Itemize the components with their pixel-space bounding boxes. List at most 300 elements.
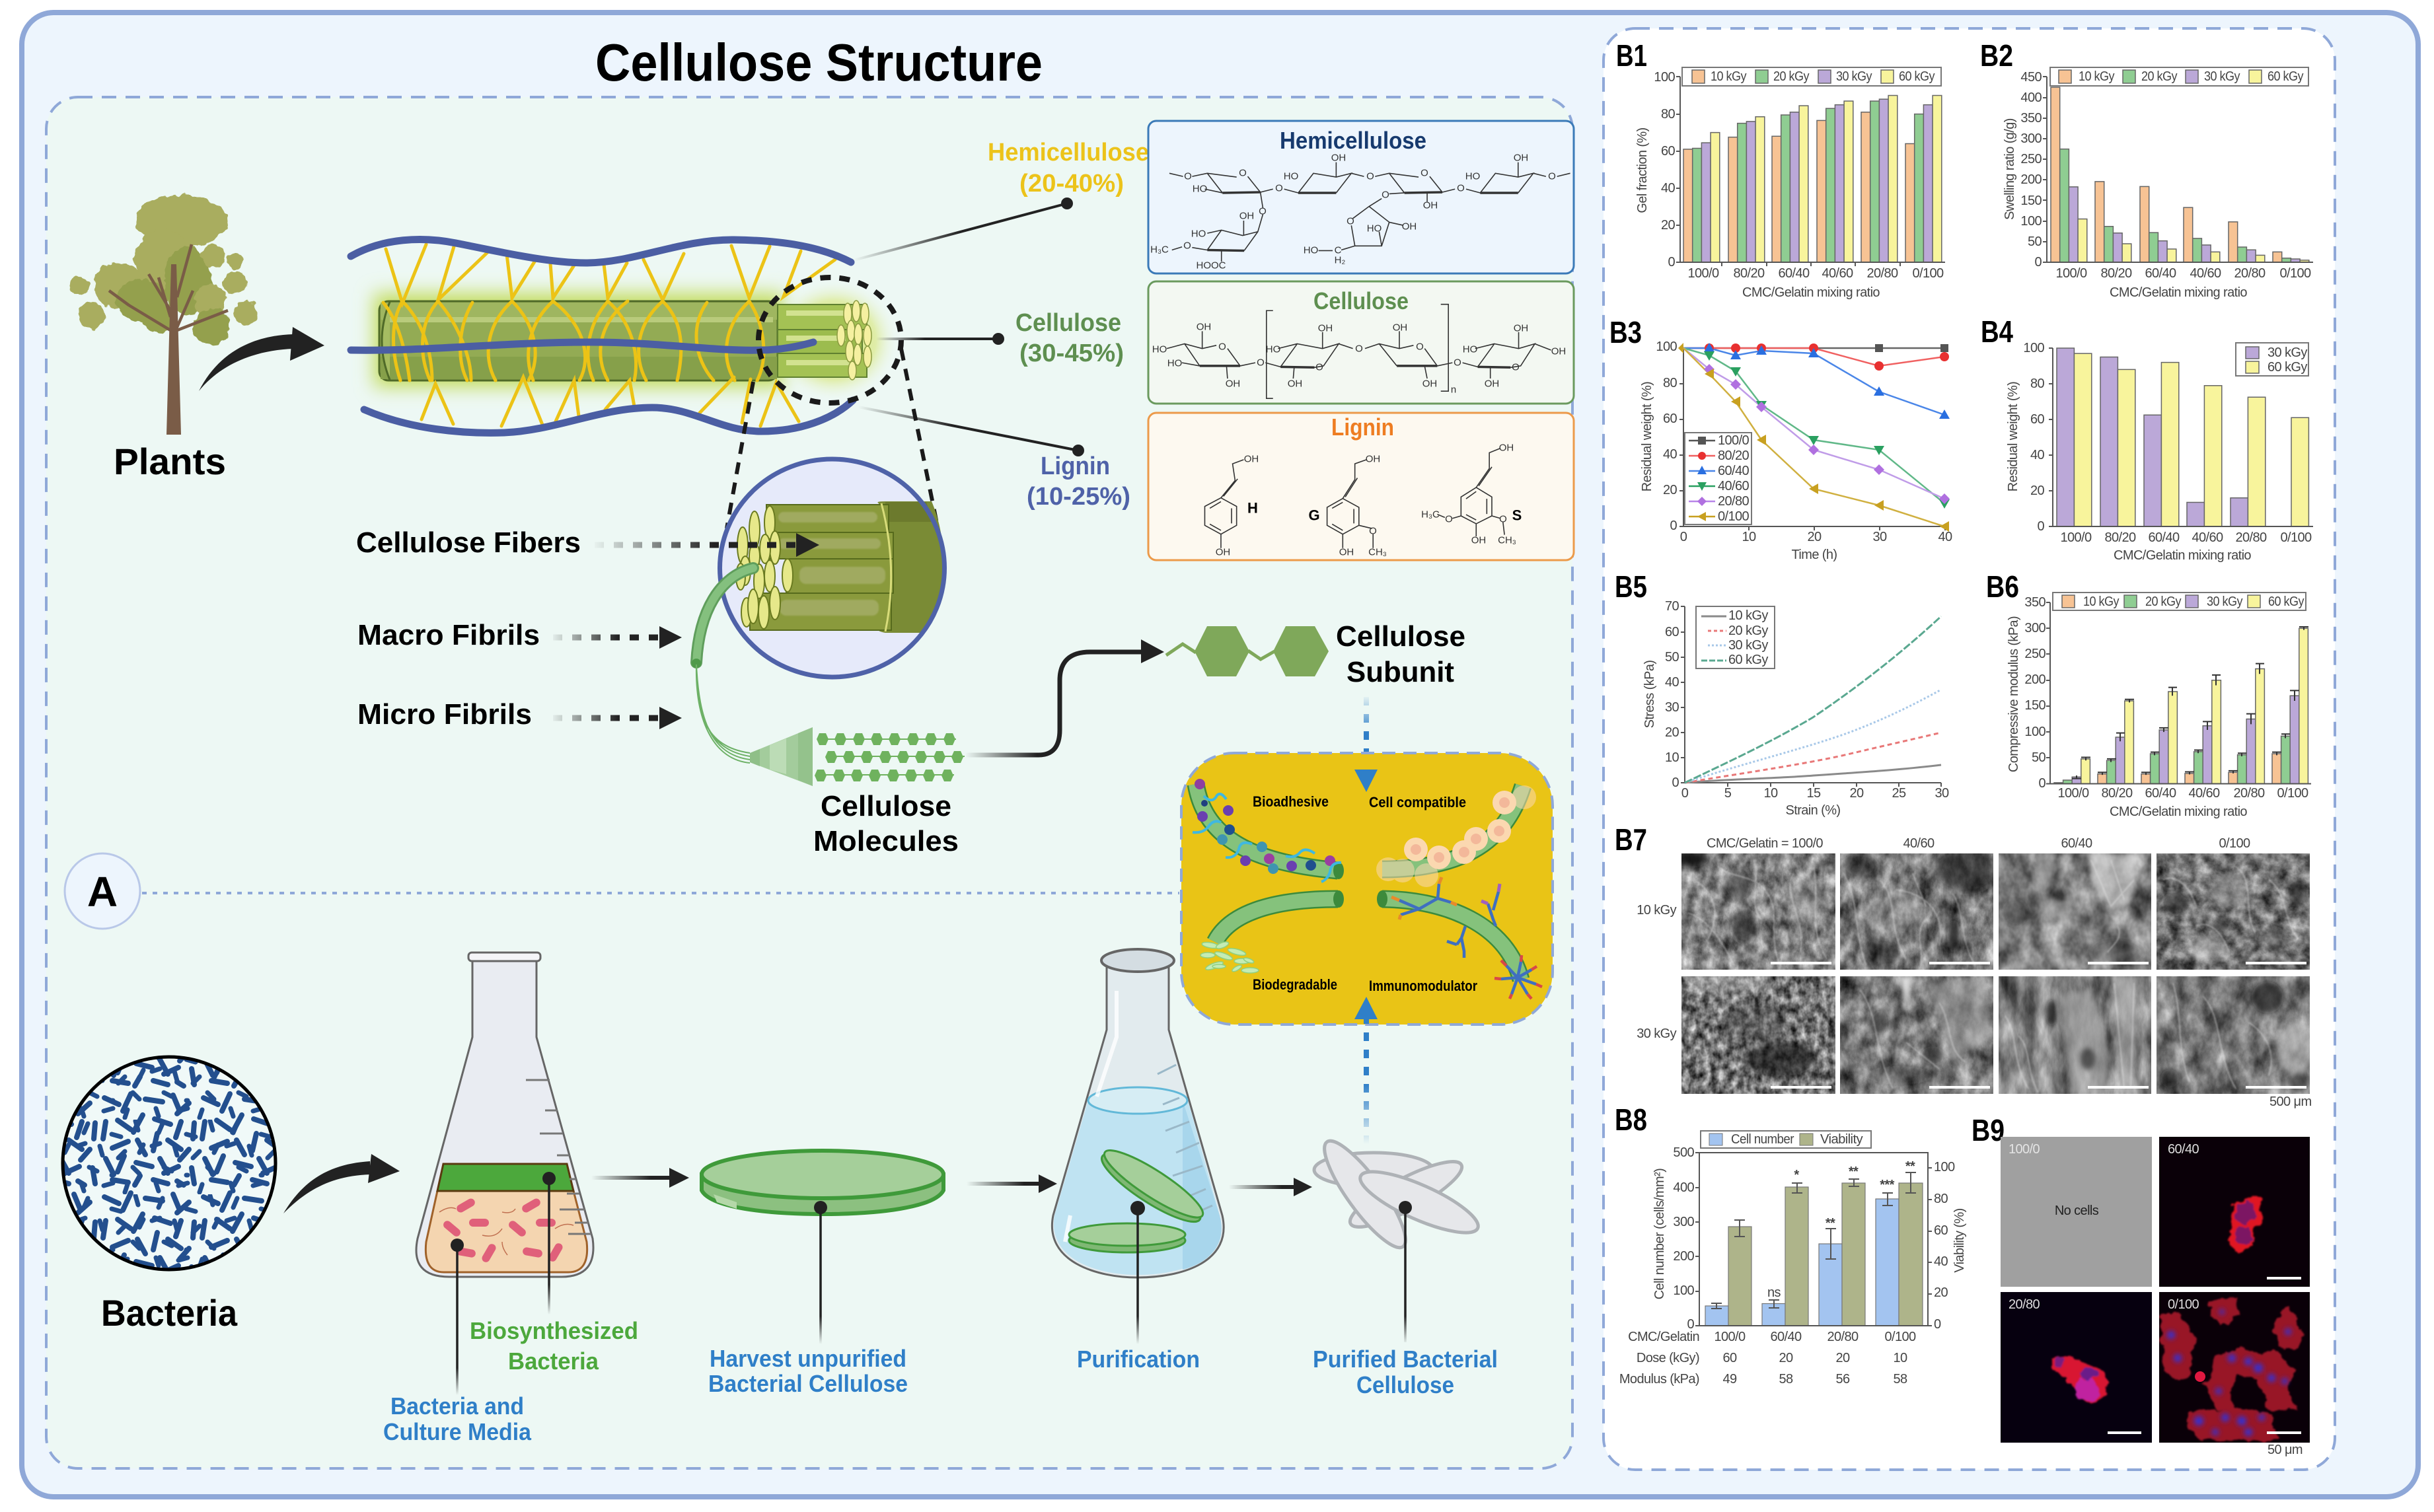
hemicellulose atom labels: HO [1304,244,1318,256]
cellulose atom labels: O [1218,341,1226,353]
chart B8: cell number and viability: 200 [1673,1249,1694,1264]
arrow: molecules to subunit [965,639,1164,755]
chart B5: stress strain: 30 [1665,700,1679,715]
chart B8: cell number and viability: 100 [1934,1160,1955,1174]
label: hemicellulose share [988,139,1149,198]
label: Cellulose Subunit: Cellulose [1336,620,1465,653]
chart B2: swelling ratio: 250 [2020,152,2042,166]
label: Cellulose Molecules: Molecules [813,825,959,857]
chart B6: compressive modulus: 350 [2024,595,2046,610]
chart B2: swelling ratio: 20/80 [2234,266,2266,281]
molecule funnel [750,727,813,786]
figure B9: fluorescence micrographs [1972,1113,2310,1457]
chart B8: cell number and viability: 100 [1673,1283,1694,1298]
lignin atom labels: CH₃ [1368,547,1387,558]
chart B6: compressive modulus: 100 [2024,725,2046,739]
chart B5: stress strain: 50 [1665,650,1679,665]
chart B1: gel fraction: B1 [1616,38,1647,73]
chart B8: cell number and viability: 80 [1934,1192,1948,1206]
label: Immunomodulator: Immunomodulator [1369,978,1477,994]
label: Bacteria and Culture Media: Bacteria and [390,1392,524,1420]
cellulose atom labels: HO [1167,358,1182,369]
chart B6: compressive modulus: 300 [2024,621,2046,635]
label: cellulose share: Cellulose [1015,309,1121,337]
table B8: 49 [1722,1372,1737,1386]
figure B7: SEM micrographs: 40/60 [1903,836,1935,851]
chart B5: stress strain: 20 [1665,725,1679,740]
chart B5: stress strain [1615,569,1949,818]
chart B3: residual weight over time: 40 [1663,447,1677,462]
chart B1: gel fraction: 100 [1654,70,1675,85]
chart B5: stress strain: 5 [1724,786,1732,801]
chart B3: residual weight over time: 0 [1680,530,1687,544]
chart B8: cell number and viability: ns [1767,1285,1781,1300]
chart B6: compressive modulus: 0/100 [2277,786,2308,801]
cellulose atom labels: OH [1485,378,1499,390]
chart B5: stress strain: 10 [1665,750,1679,765]
chart B5: stress strain: 70 [1665,599,1679,614]
chart B1: gel fraction: 30 kGy [1836,69,1872,84]
figure B7: SEM micrographs: 10 kGy [1637,903,1677,918]
chart B3: residual weight over time: 0 [1670,519,1677,533]
image 20/80: 20/80 [2009,1297,2040,1312]
arrow: micro fibrils [553,707,682,729]
chart B8: cell number and viability: 20 [1934,1285,1948,1300]
label: Macro Fibrils: Macro Fibrils [357,619,540,651]
chart B3: residual weight over time: 20 [1807,530,1822,544]
arrow: macro fibrils [553,626,682,649]
arrow: plants to fiber [199,327,324,391]
chart B4: residual weight by ratio: 100/0 [2060,530,2092,545]
chart B6: compressive modulus: 100/0 [2057,786,2089,801]
chart B1: gel fraction: CMC/Gelatin mixing ratio [1742,285,1880,300]
label: Harvest unpurified Bacterial Cellulose: Bacterial Cellulose [708,1370,908,1397]
hemicellulose atom labels: H₂ [1335,255,1346,266]
label: Harvest unpurified Bacterial Cellulose: Harvest unpurified [710,1345,906,1372]
label: Micro Fibrils: Micro Fibrils [357,698,532,731]
image 100/0: No cells [2055,1204,2099,1218]
cellulose atom labels: OH [1393,322,1407,333]
hemicellulose atom labels: O [1275,182,1283,194]
lignin atom labels: O [1499,514,1507,524]
arrow: disc to purification [967,1174,1057,1193]
fiber cylinder [379,301,778,380]
chart B6: compressive modulus: 200 [2024,672,2046,687]
fibril and micro fibrils [692,568,813,786]
cellulose atom labels: O [1416,341,1424,353]
chart B8: cell number and viability: B8 [1615,1102,1647,1137]
image 60/40: 60/40 [2168,1142,2199,1157]
chart B6: compressive modulus: 20/80 [2233,786,2265,801]
magnifier circle: cellulose fibers [720,459,945,677]
dashed zoom circle [758,277,901,403]
chart B1: gel fraction: 100/0 [1687,266,1719,281]
table B8: 58 [1779,1372,1793,1386]
chart B6: compressive modulus: 150 [2024,698,2046,713]
chart B8: cell number and viability: ** [1849,1165,1859,1179]
chart B2: swelling ratio: 100/0 [2055,266,2087,281]
hemicellulose atom labels: O [1457,182,1465,194]
icon: purified cellulose pieces [1313,1132,1485,1257]
label: Cellulose Fibers: Cellulose Fibers [356,526,581,559]
chart B1: gel fraction: 20 [1661,218,1675,233]
chart B8: cell number and viability: ** [1826,1216,1835,1231]
chart B8: cell number and viability: *** [1880,1178,1895,1192]
figure B7: SEM micrographs: 500 μm [2269,1095,2312,1109]
lignin atom labels: S [1512,507,1522,523]
chart B8: cell number and viability: 300 [1673,1215,1694,1229]
hemicellulose atom labels: OH [1331,152,1346,164]
chart B4: residual weight by ratio: 40 [2030,448,2044,462]
arrow: cellulose fibers [595,533,819,557]
label: Bioadhesive: Bioadhesive [1253,793,1329,810]
chart B1: gel fraction: 20 kGy [1773,69,1810,84]
arrow: bacteria to flask [283,1154,400,1213]
cellulose atom labels: HO [1463,343,1477,355]
legend B3: 100/0 [1718,433,1750,448]
chart B4: residual weight by ratio: 100 [2023,341,2044,355]
chart B6: compressive modulus: 10 kGy [2083,594,2120,609]
title: Cellulose Structure [595,33,1043,92]
chart B2: swelling ratio: 0 [2034,255,2042,270]
table B8 [1619,1330,1916,1386]
chart B4: residual weight by ratio: 0 [2037,519,2044,534]
lignin atom labels: OH [1471,535,1486,546]
chart B5: stress strain: 15 [1806,786,1821,801]
chart B1: gel fraction: 60 [1661,144,1675,159]
badge: panel A: A [87,868,118,916]
label: Purified Bacterial Cellulose: Cellulose [1356,1371,1454,1398]
table B8: 0/100 [1884,1330,1916,1344]
hemicellulose atom labels: O [1420,168,1428,178]
chart B4: residual weight by ratio: B4 [1981,314,2013,349]
chart B8: cell number and viability: 40 [1934,1254,1948,1269]
figure B7: SEM micrographs: B7 [1615,822,1647,857]
legend B8 [1701,1131,1871,1148]
leader: harvest [814,1201,827,1344]
panel: cellulose structure [1148,281,1574,404]
cellulose atom labels: HO [1152,343,1167,355]
figure B7: SEM micrographs: CMC/Gelatin = 100/0 [1707,836,1823,851]
label: Cellulose Molecules: Cellulose [821,790,951,822]
chart B4: residual weight by ratio: Residual weight (%) [2006,382,2020,491]
chart B3: residual weight over time: 20 [1663,483,1677,497]
chart B6: compressive modulus [1986,569,2311,819]
chart B4: residual weight by ratio: 40/60 [2192,530,2223,545]
chart B6: compressive modulus: 60 kGy [2268,594,2305,609]
axes B8 [1695,1153,1932,1326]
chart B2: swelling ratio: 50 [2028,234,2042,249]
image 100/0: 100/0 [2009,1142,2040,1157]
chart B4: residual weight by ratio: 20/80 [2235,530,2267,545]
diagram: lignocellulose fiber [351,240,901,433]
cellulose atom labels: OH [1288,378,1302,390]
chart B1: gel fraction [1616,38,1945,300]
chart B1: gel fraction: 40/60 [1822,266,1853,281]
panel: cellulose structure: Cellulose [1313,287,1409,314]
fiber glow [374,293,784,387]
hemicellulose atom labels: O [1346,215,1354,227]
chart B6: compressive modulus: 60/40 [2145,786,2176,801]
chart B5: stress strain: 40 [1665,675,1679,690]
chart B3: residual weight over time: Time (h) [1792,548,1837,562]
chart B1: gel fraction: 20/80 [1866,266,1898,281]
chart B8: cell number and viability: Cell number (cells/mm²) [1652,1169,1667,1299]
chart B3: residual weight over time: 60 [1663,412,1677,426]
figure B7: SEM micrographs [1615,822,2314,1109]
label: Biosynthesized Bacteria [470,1317,638,1375]
flask graduations [526,1080,591,1234]
label: Bacteria and Culture Media: Culture Media [383,1418,532,1445]
chart B2: swelling ratio: 60/40 [2145,266,2176,281]
icon: cell compatible fibril [1376,785,1536,887]
hemicellulose atom labels: HO [1465,170,1480,182]
label: Plants: Plants [114,441,226,482]
bars [1705,1183,1923,1326]
hemicellulose atom labels: OH [1402,221,1417,233]
chart B8: cell number and viability: * [1794,1168,1799,1182]
chart B8: cell number and viability [1615,1102,1967,1386]
chart B6: compressive modulus: 80/20 [2101,786,2133,801]
fiber bundle sleeve [877,501,944,633]
chart B2: swelling ratio: 80/20 [2100,266,2132,281]
chart B5: stress strain: Strain (%) [1786,803,1840,818]
chart B3: residual weight over time: 100 [1656,340,1677,354]
chart B8: cell number and viability: 0 [1687,1317,1694,1332]
chart B5: stress strain: 30 [1935,786,1949,801]
panel: lignin structure [1148,413,1574,560]
lignin atom labels: H₃C [1421,509,1440,521]
label: lignin share [1027,452,1130,511]
chart B5: stress strain: Stress (kPa) [1642,661,1657,728]
table B8: 100/0 [1714,1330,1746,1344]
legend B3: 80/20 [1718,449,1750,463]
hemicellulose atom labels: HO [1193,184,1207,194]
cellulose atom labels: O [1454,357,1461,369]
icon: tree [70,195,258,435]
chart B6: compressive modulus: 40/60 [2188,786,2220,801]
table B8: CMC/Gelatin [1628,1330,1699,1344]
hemicellulose atom labels: O [1184,170,1192,182]
chart B1: gel fraction: Gel fraction (%) [1635,127,1650,213]
label: Biosynthesized Bacteria: Bacteria [508,1348,599,1375]
chart B2: swelling ratio: 60 kGy [2268,69,2304,84]
image 60/40 [2159,1137,2310,1287]
lignin atom labels: OH [1339,547,1354,558]
chart B2: swelling ratio: 10 kGy [2079,69,2115,84]
cellulose atom labels: O [1512,362,1520,373]
cellulose atom labels [1152,321,1566,395]
cellulose atom labels: O [1315,362,1323,373]
cellulose atom labels: HO [1266,343,1280,355]
hemicellulose atom labels: O [1239,168,1247,178]
series markers [1678,343,1950,532]
label: lignin share: (10-25%) [1027,483,1130,511]
label: Cellulose Molecules [813,790,959,857]
hemicellulose atom labels: H₃C [1150,244,1169,255]
arrowhead: from subunit [1354,770,1378,792]
legend B8: Viability [1820,1132,1863,1147]
hemicellulose atom labels: HO [1367,223,1382,234]
label: Biodegradable: Biodegradable [1253,976,1337,993]
lignin atom labels: OH [1499,443,1514,453]
chart B1: gel fraction: 80 [1661,107,1675,122]
label: Harvest unpurified Bacterial Cellulose [708,1345,908,1397]
chart B4: residual weight by ratio: 80/20 [2104,530,2136,545]
lignin atom labels: O [1369,526,1377,536]
image 0/100 [2159,1292,2310,1443]
chart B1: gel fraction: 40 [1661,181,1675,196]
chart B5: stress strain: 10 [1763,786,1778,801]
chart B5: stress strain: 20 kGy [1728,624,1768,638]
badge: panel A [65,853,1179,929]
table B8: 10 [1893,1351,1907,1365]
cellulose atom labels: OH [1318,322,1333,334]
chart B4: residual weight by ratio: 20 [2030,484,2044,498]
chart B6: compressive modulus: 250 [2024,647,2046,661]
label: Bacteria: Bacteria [101,1292,238,1334]
label: Bacteria and Culture Media [383,1392,532,1445]
lignin atom labels [1216,443,1522,558]
table B8: Modulus (kPa) [1619,1372,1699,1386]
hemicellulose atom labels: OH [1239,210,1254,222]
chart B2: swelling ratio: 300 [2020,131,2042,146]
chart B1: gel fraction: 60/40 [1778,266,1810,281]
chart B2: swelling ratio: 400 [2020,90,2042,105]
error bars B8 [1711,1172,1916,1309]
figure B7: SEM micrographs: 0/100 [2219,836,2250,851]
label: cellulose share: (30-45%) [1019,340,1124,367]
leader: purified cellulose [1399,1201,1412,1342]
chart B3: residual weight over time: B3 [1609,315,1642,349]
chart B5: stress strain: B5 [1615,569,1647,604]
icon: bioadhesive fibril [1193,779,1344,882]
chart B4: residual weight by ratio: 60/40 [2148,530,2180,545]
table B8: 20 [1779,1351,1793,1365]
legend B3: 60/40 [1718,464,1750,478]
biosynthesized layer [437,1164,573,1191]
lignin atom labels: OH [1366,453,1380,465]
chart B4: residual weight by ratio: CMC/Gelatin mixing ratio [2114,548,2251,563]
hemicellulose atom labels: OH [1423,199,1438,211]
hemicellulose atom labels: O [1382,189,1389,201]
cellulose atom labels: n [1451,384,1456,395]
hemicellulose atom labels: HO [1191,229,1206,239]
chart B8: cell number and viability: 400 [1673,1180,1694,1195]
panel: hemicellulose structure [1148,121,1574,273]
leader: purification [1130,1201,1145,1344]
chart B5: stress strain: 0 [1672,775,1679,790]
cellulose atom labels: OH [1422,378,1437,390]
icon: immunomodulator fibril [1377,877,1542,999]
table B8: 60 [1722,1351,1737,1365]
chart B8: cell number and viability: 60 [1934,1223,1948,1238]
chart B4: residual weight by ratio [1981,314,2313,563]
chart B5: stress strain: 20 [1849,786,1864,801]
table B8: 20/80 [1827,1330,1859,1344]
icon: cellulose subunit hexagons [1166,626,1329,676]
chart B5: stress strain: 60 [1665,625,1679,639]
chart B3: residual weight over time: 10 [1742,530,1756,544]
inner cellulose bundle [778,301,871,380]
hemicellulose atom labels: O [1183,240,1191,251]
panel A: cellulose sources [46,97,1574,1468]
icon: biodegradable fibril [1200,890,1344,973]
hemicellulose atom labels: O [1366,170,1374,182]
leader: hemicellulose [854,198,1073,260]
panel: hemicellulose structure: Hemicellulose [1280,127,1426,154]
table B8: Dose (kGy) [1637,1351,1699,1365]
label: Purification: Purification [1077,1346,1200,1373]
figure B9: fluorescence micrographs: 50 μm [2268,1443,2303,1457]
hemicellulose atom labels: O [1259,206,1267,217]
chart B6: compressive modulus: B6 [1986,569,2019,604]
chart B8: cell number and viability: 500 [1673,1145,1694,1160]
legend B3: 0/100 [1718,509,1750,524]
SEM row 1 [1670,847,2310,970]
error bars [2072,627,2308,779]
legend B8: Cell number [1731,1132,1794,1147]
chart B2: swelling ratio: 30 kGy [2204,69,2240,84]
chart B5: stress strain: 0 [1681,786,1689,801]
table B8: 56 [1835,1372,1850,1386]
leader: cellulose [876,333,1004,345]
arrow: purified cellulose to properties [1364,1019,1369,1144]
chart B1: gel fraction: 0/100 [1912,266,1944,281]
flat cellulose disc [1069,1223,1185,1252]
cellulose atom labels: OH [1514,322,1528,334]
chart B1: gel fraction: 0 [1668,255,1675,270]
chart B2: swelling ratio: 100 [2020,214,2042,229]
chart B2: swelling ratio: 450 [2020,70,2042,85]
table B8: 60/40 [1770,1330,1802,1344]
label: lignin share: Lignin [1041,452,1110,480]
label: hemicellulose share: (20-40%) [1019,170,1124,198]
label: Cellulose Subunit [1336,620,1465,688]
chart B2: swelling ratio: 350 [2020,111,2042,126]
image 20/80 [2001,1292,2152,1443]
lignin atom labels: OH [1216,547,1230,558]
arrow: purification to purified [1229,1178,1312,1196]
label: hemicellulose share: Hemicellulose [988,139,1149,166]
chart B6: compressive modulus: Compressive modulus (kPa) [2007,616,2021,772]
chart B6: compressive modulus: 20 kGy [2145,594,2182,609]
lignin atom labels: OH [1244,453,1259,465]
icon: unpurified cellulose disc [702,1151,943,1214]
chart B5: stress strain: 10 kGy [1728,608,1768,623]
chart B2: swelling ratio: CMC/Gelatin mixing ratio [2110,285,2247,300]
arrow: subunit to properties [1364,697,1369,770]
label: Purified Bacterial Cellulose [1313,1346,1498,1398]
chart B4: residual weight by ratio: 30 kGy [2268,345,2307,360]
chart B8: cell number and viability: 0 [1934,1317,1941,1332]
legend B3: 40/60 [1718,479,1750,493]
panel: lignin structure: Lignin [1331,414,1394,441]
dashed zoom lines to magnifier [727,349,938,528]
leader: lignin [858,407,1084,456]
cellulose atom labels: O [1355,343,1363,354]
label: Purified Bacterial Cellulose: Purified Bacterial [1313,1346,1498,1373]
chart B3: residual weight over time [1609,315,1952,562]
chart B4: residual weight by ratio: 0/100 [2280,530,2312,545]
table B8: 58 [1893,1372,1907,1386]
chart B4: residual weight by ratio: 80 [2030,377,2044,391]
water [1054,1087,1222,1275]
chart B2: swelling ratio: 200 [2020,172,2042,187]
chart B5: stress strain: 30 kGy [1728,638,1768,653]
hemicellulose atom labels: C [1335,244,1342,256]
arrowhead: from bacterial cellulose [1354,997,1378,1019]
